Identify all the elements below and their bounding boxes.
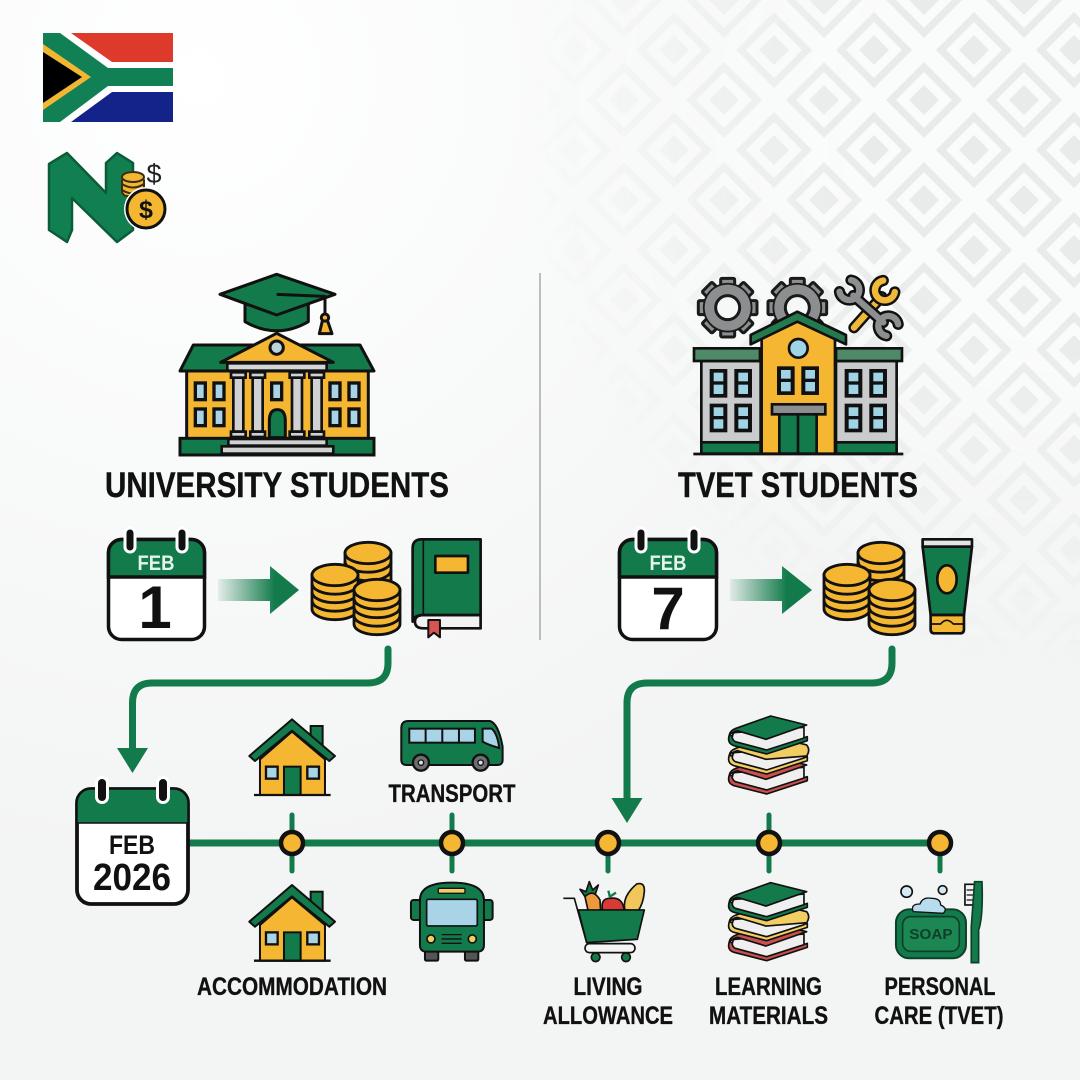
icon: soap and toothbrush: SOAP — [909, 927, 953, 943]
heading: TVET Students: TVET STUDENTS — [678, 466, 918, 505]
icon: shopping cart with groceries — [563, 882, 644, 962]
icon: soap and toothbrush — [896, 882, 982, 963]
label: Personal Care (TVET) — [874, 973, 1004, 1030]
logo: N with coins: $ — [146, 159, 162, 189]
heading: University Students: UNIVERSITY STUDENTS — [105, 466, 449, 505]
icon: books above timeline — [729, 716, 809, 794]
calendar: Feb 2026: 2026 — [93, 857, 171, 899]
timeline — [186, 815, 951, 871]
icon: gear right — [768, 278, 827, 337]
calendar: Feb 7 — [620, 533, 716, 642]
icon: TVET college with gears and tools — [693, 278, 903, 454]
icon: gear left — [698, 278, 757, 337]
icon: university building with graduation cap — [180, 274, 374, 455]
divider — [539, 273, 541, 640]
icon: crossed wrench and spanner — [839, 280, 898, 336]
calendar: Feb 7: 7 — [651, 575, 685, 642]
logo: N with coins: $ — [139, 196, 153, 224]
arrow: University calendar to funds — [218, 566, 299, 614]
arrow: TVET calendar to funds — [730, 566, 812, 614]
icon: South African flag — [43, 33, 173, 122]
label: Accommodation: ACCOMMODATION — [197, 973, 387, 1001]
label: Living Allowance: ALLOWANCE — [543, 1002, 673, 1030]
label: Learning Materials — [709, 973, 828, 1030]
label: Living Allowance — [543, 973, 673, 1030]
icon: coin stacks TVET — [824, 542, 915, 635]
icon: personal care tube — [923, 539, 972, 633]
calendar: Feb 7: FEB — [650, 552, 686, 575]
calendar: Feb 1 — [108, 533, 204, 641]
calendar: Feb 1: 1 — [138, 574, 172, 641]
icon: coin stacks University — [312, 542, 400, 635]
logo: N with coins — [49, 153, 168, 242]
label: Learning Materials: MATERIALS — [709, 1002, 828, 1030]
icon: green textbook — [413, 539, 481, 637]
icon: books below timeline — [729, 883, 809, 961]
calendar: Feb 1: FEB — [138, 552, 174, 575]
label: Living Allowance: LIVING — [574, 973, 642, 1001]
icon: house above timeline — [249, 719, 335, 795]
label: Personal Care (TVET): CARE (TVET) — [874, 1002, 1004, 1030]
label: Learning Materials: LEARNING — [715, 973, 822, 1001]
label: Transport: TRANSPORT — [388, 780, 516, 808]
icon: side-view bus — [401, 721, 503, 771]
icon: front-view bus — [411, 883, 493, 961]
calendar: Feb 2026 — [77, 783, 188, 904]
connector: TVET funds to living allowance — [612, 649, 892, 823]
icon: graduation cap — [220, 274, 335, 334]
label: Personal Care (TVET): PERSONAL — [884, 973, 996, 1001]
calendar: Feb 2026: FEB — [109, 830, 155, 860]
background diamond pattern — [736, 0, 1080, 376]
icon: house below timeline — [249, 885, 335, 961]
connector: University funds to Feb 2026 — [117, 649, 388, 773]
